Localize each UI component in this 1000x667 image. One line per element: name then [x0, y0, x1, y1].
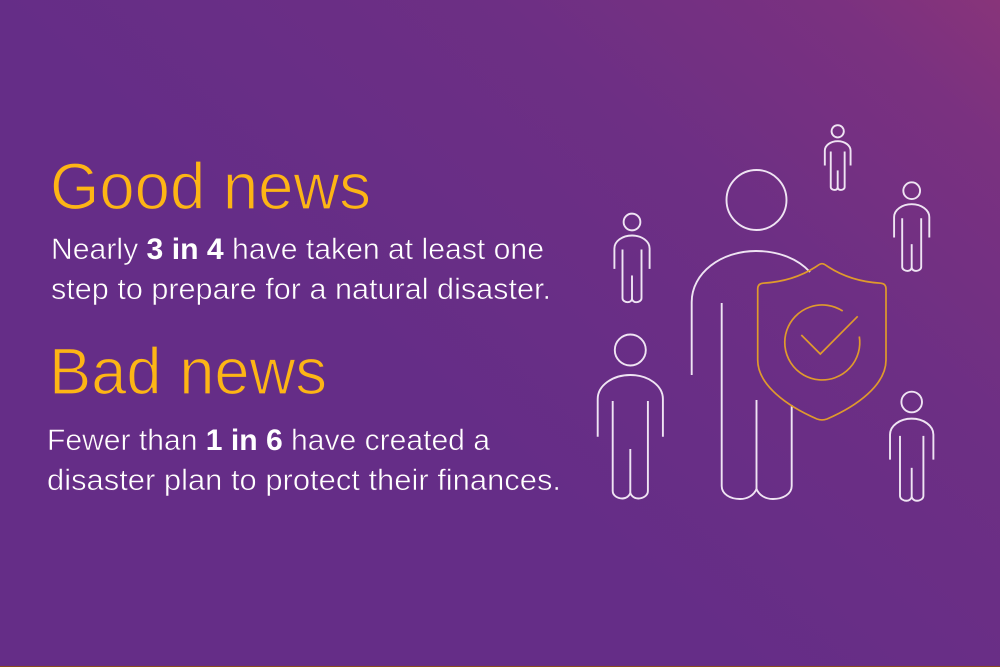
- text: bad news body: [47, 424, 561, 497]
- icon: person bottom left: [598, 334, 663, 498]
- text: bad news body: disaster plan to protect their finances.: [47, 464, 561, 497]
- text: good news body: [51, 233, 551, 306]
- text: bad news body: Fewer than 1 in 6 have created a: [47, 424, 490, 457]
- icon: person right: [894, 182, 929, 271]
- icon: large person: [692, 170, 810, 499]
- text: good news body: step to prepare for a natural disaster.: [51, 273, 551, 306]
- icon: person left: [614, 214, 650, 302]
- icon: person top: [825, 125, 851, 190]
- icon: person bottom right: [890, 392, 933, 501]
- icon: shield with check: [758, 264, 886, 420]
- illustration: people and shield: [598, 125, 933, 501]
- heading: good news: Good news: [50, 149, 371, 223]
- panel: text block: [47, 149, 561, 497]
- heading: bad news: Bad news: [49, 334, 327, 408]
- text: good news body: Nearly 3 in 4 have taken at least one: [51, 233, 544, 266]
